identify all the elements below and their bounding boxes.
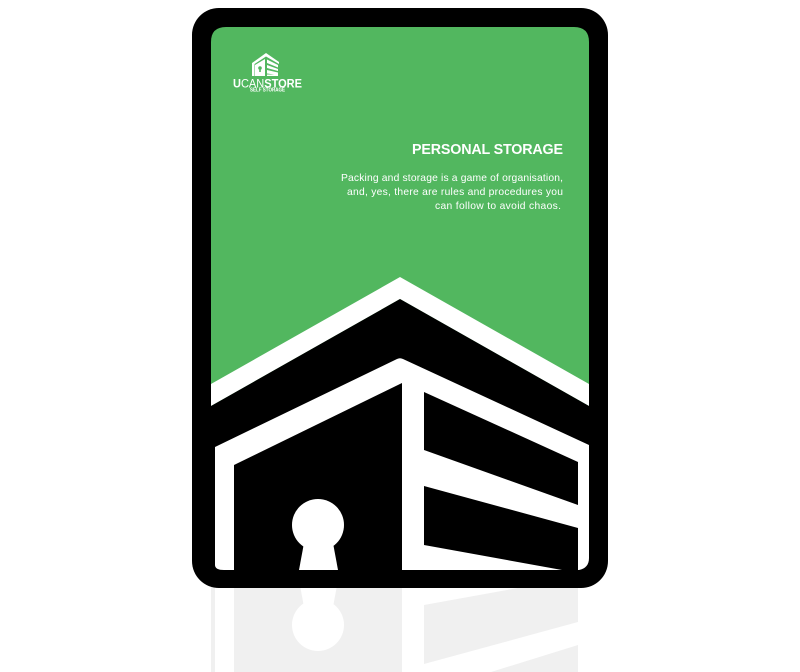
upper shutter panel [424,392,578,505]
roof stripe [211,277,589,406]
body text: and, yes, there are rules and procedures you [347,187,563,198]
storage door left [234,383,402,570]
reflection of the building [211,580,578,672]
green panel [211,27,589,406]
icon: logo building [252,53,279,76]
logo wordmark: UCANSTORE [233,76,302,90]
card frame [192,8,608,588]
body text: can follow to avoid chaos. [435,201,561,212]
logo [233,53,302,94]
heading: PERSONAL STORAGE [412,142,563,158]
building [215,358,589,570]
icon: keyhole [292,499,344,570]
body text [341,173,563,212]
logo tagline: SELF STORAGE [250,88,286,94]
lower shutter panel [424,486,578,570]
black roof band [211,299,589,450]
building outline [215,358,589,570]
body text: Packing and storage is a game of organisation, [341,173,563,184]
